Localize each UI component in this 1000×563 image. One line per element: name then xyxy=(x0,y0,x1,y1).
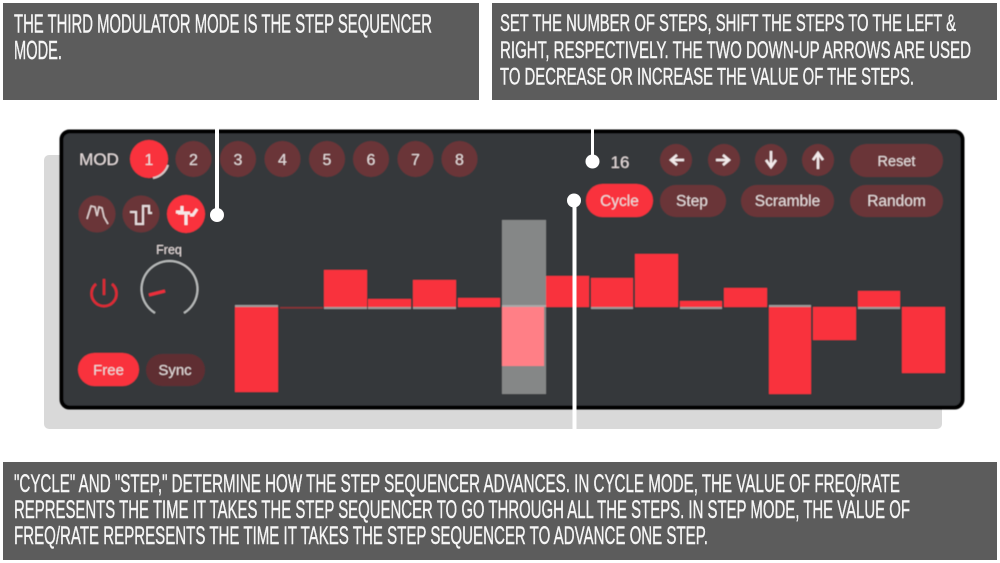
callout: third modulator mode xyxy=(3,3,479,100)
mod number buttons: 3 xyxy=(234,152,243,169)
step bars chart xyxy=(235,220,945,394)
random button: Random xyxy=(867,193,926,210)
reset button: Reset xyxy=(878,154,915,170)
leader line: step count xyxy=(586,100,600,168)
step button: Step xyxy=(676,193,708,210)
drop shadow panel xyxy=(44,155,942,429)
mod number buttons: 5 xyxy=(323,152,332,169)
reset button xyxy=(850,144,943,177)
mod number buttons: 1 xyxy=(145,152,154,169)
callout: third modulator mode: MODE. xyxy=(14,35,62,65)
mod number buttons: 8 xyxy=(455,152,464,169)
arrow buttons xyxy=(660,144,834,176)
free and sync buttons: Sync xyxy=(158,362,192,379)
random button xyxy=(850,185,943,217)
step count: 16 xyxy=(611,153,629,172)
step sequencer panel xyxy=(62,132,962,408)
mod label: MOD xyxy=(79,150,119,169)
scramble button: Scramble xyxy=(755,193,820,210)
callout: third modulator mode: THE THIRD MODULATOR MODE IS THE STEP SEQUENCER xyxy=(14,8,432,38)
scramble button xyxy=(741,185,834,217)
free and sync buttons: Free xyxy=(93,362,124,379)
free and sync buttons xyxy=(78,353,205,386)
mod number buttons: 6 xyxy=(367,152,376,169)
leader line: mode icon xyxy=(210,100,224,222)
cycle button: Cycle xyxy=(600,193,639,210)
step button xyxy=(660,185,726,217)
mod number buttons: 4 xyxy=(278,152,287,169)
callout: cycle and step xyxy=(3,462,997,560)
power icon xyxy=(92,279,116,306)
modulator mode icons xyxy=(78,195,205,233)
freq knob xyxy=(142,261,198,313)
cycle button xyxy=(586,184,653,217)
callout: steps and arrows xyxy=(492,3,997,100)
mod number buttons: 7 xyxy=(411,152,420,169)
leader line: cycle button xyxy=(567,194,581,462)
mod number buttons xyxy=(130,140,478,178)
freq label: Freq xyxy=(156,243,182,257)
mod number buttons: 2 xyxy=(189,152,198,169)
